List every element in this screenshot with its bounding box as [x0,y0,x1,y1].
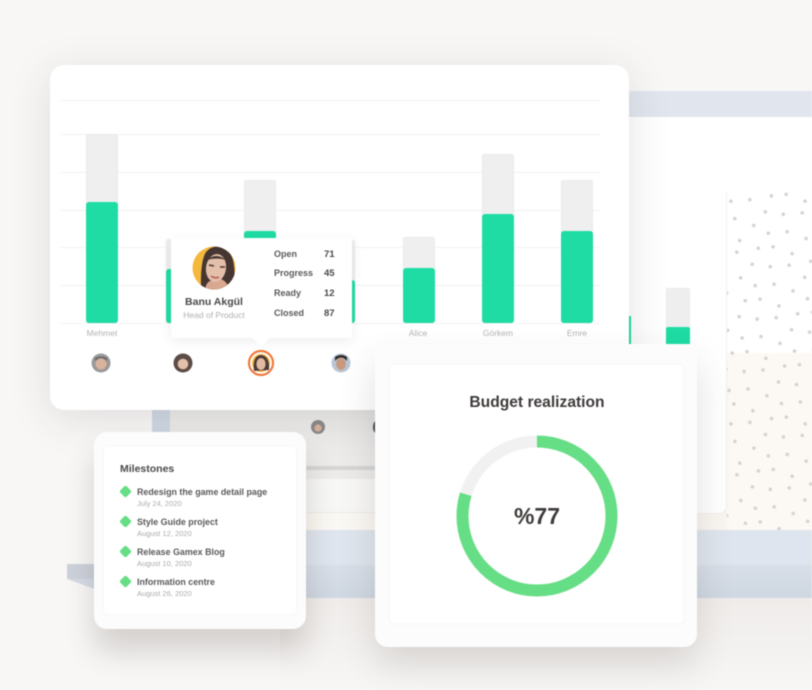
avatar: second person [174,354,192,372]
bar: Alice [402,237,436,324]
donut chart: %77 [514,503,560,529]
milestone 2: Style Guide project [137,517,218,527]
milestone 2 [119,515,218,538]
tooltip [171,238,352,338]
grey line row [306,466,375,470]
window base band [152,565,812,598]
avatar: Banu selected [249,351,273,375]
stat: ready: Ready [274,288,301,298]
small avatar behind [310,420,326,434]
stat: open: Open [274,249,297,259]
avatar: fourth person [332,354,350,372]
bar: Görkem [481,154,515,324]
tooltip pointer [253,330,269,346]
background bar sliver [629,316,631,344]
milestone 4 [119,575,216,598]
stat: progress: 45 [324,268,335,279]
stat: closed: 87 [324,308,335,319]
milestone 3: Release Gamex Blog [137,547,225,557]
panel: budget realization [375,344,697,647]
label: Mehmet: Mehmet [87,328,117,338]
inner panel edge [600,192,727,514]
bar: fourth person [351,240,356,324]
stat: ready [274,288,335,299]
background bar fill [666,327,690,344]
milestone 3: August 10, 2020 [137,559,192,568]
budget heading: Budget realization [469,394,605,411]
cream strip below inner panel [600,510,730,530]
dotted panel [726,192,812,530]
panel: milestones [94,432,306,629]
milestone 1: Redesign the game detail page [137,487,267,497]
milestone 4: Information centre [137,577,215,587]
stat: progress: Progress [274,268,313,278]
milestone 1: July 24, 2020 [137,499,182,508]
window body [152,117,812,530]
donut chart [456,434,618,598]
stat: ready: 12 [324,288,335,299]
panel: bar chart card [50,65,629,410]
small avatar partial [373,421,379,433]
base left end [66,564,94,589]
shaded strip behind cards [152,410,375,530]
bar: Emre [560,180,594,324]
avatar: Mehmet [92,354,110,372]
window top band [152,91,812,117]
window lower band [152,530,812,565]
avatar row [91,349,351,377]
label: Emre: Emre [567,328,587,338]
background bar track [666,288,690,344]
bar chart [85,134,594,338]
stat: closed: Closed [274,308,304,318]
role: Head of Product [183,310,245,320]
bar: second person [165,239,172,324]
bar: Mehmet [85,134,119,324]
stat: open [274,249,335,260]
milestone 2: August 12, 2020 [137,529,192,538]
stat: progress [274,268,335,279]
floor shade [280,598,812,690]
name: Banu Akgül [185,296,243,308]
inner panel [390,365,683,623]
inner panel [104,447,296,614]
stat: closed [274,308,335,319]
milestone 1 [119,485,268,508]
milestone 4: August 26, 2020 [137,589,192,598]
bar: Banu [243,180,277,239]
blue column [152,410,170,432]
milestones heading: Milestones [120,463,174,475]
label: Alice: Alice [409,328,427,338]
milestone 3 [119,545,225,568]
cream row [306,513,375,530]
label: Görkem: Görkem [483,328,513,338]
portrait [192,246,236,290]
white row [306,479,375,512]
stat: open: 71 [324,249,335,260]
